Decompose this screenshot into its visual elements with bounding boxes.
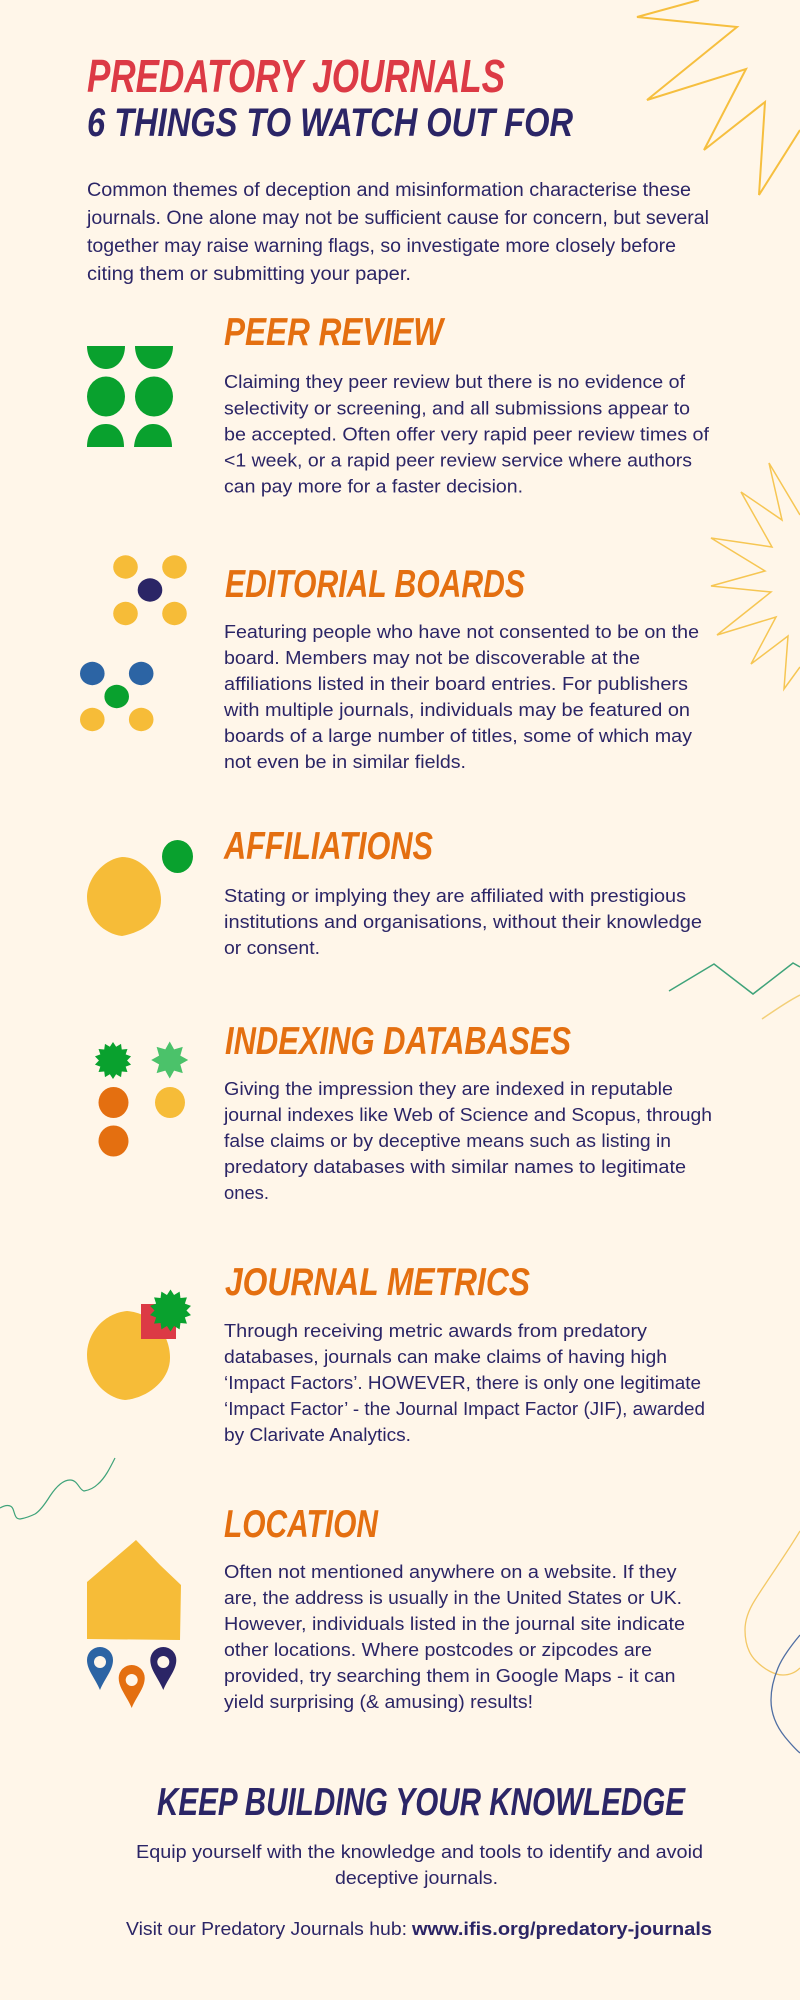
text: editorial boards [223, 621, 699, 772]
text: indexing databases: ones. [224, 1182, 269, 1203]
icon: blob, red square and green star [87, 1290, 191, 1400]
heading: peer review: PEER REVIEW [224, 311, 446, 354]
text: peer review [224, 371, 710, 496]
title [87, 50, 573, 145]
text: peer review: be accepted. Often offer very rapid peer review times of [224, 424, 710, 444]
heading: affiliations: AFFILIATIONS [223, 825, 433, 868]
icon: yellow blob and green dot [87, 840, 193, 936]
text: editorial boards: with multiple journals, individuals may be featured on [223, 699, 690, 720]
decoration: top yellow zigzag [637, 0, 800, 195]
text: indexing databases: Giving the impression they are indexed in reputable [224, 1078, 673, 1099]
text: hub link [126, 1918, 712, 1939]
text: peer review: can pay more for a faster decision. [224, 476, 523, 496]
text: location: provided, try searching them in Google Maps - it can [224, 1665, 676, 1686]
text: location [224, 1561, 685, 1712]
decoration: yellow line [762, 995, 800, 1019]
decoration: green squiggle [0, 1458, 115, 1519]
closing section [126, 1781, 712, 1939]
text: editorial boards: affiliations listed in their board entries. For publishers [224, 673, 688, 694]
text: location: However, individuals listed in the journal site indicate [224, 1613, 685, 1634]
icon: lower dot cluster [80, 662, 154, 731]
text: closing message: deceptive journals. [335, 1867, 498, 1888]
intro text: journals. One alone may not be sufficient cause for concern, but several [86, 208, 709, 229]
text: journal metrics: databases, journals can make claims of having high [224, 1346, 667, 1367]
text: indexing databases: false claims or by deceptive means such as listing in [224, 1130, 671, 1151]
title line 2: 6 THINGS TO WATCH OUT FOR [87, 101, 573, 145]
text: closing message [136, 1841, 703, 1888]
text: location: other locations. Where postcodes or zipcodes are [224, 1639, 652, 1660]
decoration: green zigzag [669, 963, 800, 994]
decoration: right yellow starburst [711, 463, 800, 689]
text: journal metrics: Through receiving metric awards from predatory [224, 1320, 648, 1341]
text: indexing databases: journal indexes like Web of Science and Scopus, through [223, 1104, 712, 1125]
intro text: Common themes of deception and misinformation characterise these [87, 180, 691, 201]
text: indexing databases: predatory databases with similar names to legitimate [224, 1156, 686, 1177]
text: peer review: <1 week, or a rapid peer review service where authors [224, 450, 692, 470]
text: editorial boards: not even be in similar fields. [224, 751, 466, 772]
heading: indexing databases: INDEXING DATABASES [225, 1020, 571, 1063]
text: location: yield surprising (& amusing) results! [224, 1691, 533, 1712]
text: hub link: www.ifis.org/predatory-journals [411, 1918, 712, 1939]
text: indexing databases [223, 1078, 712, 1203]
text: journal metrics: by Clarivate Analytics. [224, 1424, 411, 1445]
text: affiliations: institutions and organisations, without their knowledge [224, 911, 702, 932]
decoration: yellow curve [745, 1531, 800, 1675]
title line 1: PREDATORY JOURNALS [87, 50, 505, 102]
panel: peer review [87, 311, 710, 496]
intro text [86, 180, 709, 285]
text: journal metrics: ‘Impact Factors’. HOWEVER, there is only one legitimate [224, 1372, 701, 1393]
text: location: are, the address is usually in the United States or UK. [224, 1587, 682, 1608]
panel: location [87, 1503, 685, 1712]
panel: editorial boards [80, 555, 699, 772]
heading: journal metrics: JOURNAL METRICS [225, 1261, 530, 1304]
text: journal metrics: ‘Impact Factor’ - the Journal Impact Factor (JIF), awarded [224, 1398, 705, 1419]
intro text: together may raise warning flags, so investigate more closely before [87, 236, 676, 257]
panel: journal metrics [87, 1261, 705, 1445]
panel: affiliations [87, 825, 702, 958]
decoration: blue curve [771, 1635, 800, 1753]
text: editorial boards: Featuring people who have not consented to be on the [224, 621, 699, 642]
text: closing message: Equip yourself with the knowledge and tools to identify and avoid [136, 1841, 703, 1862]
text: editorial boards: boards of a large number of titles, some of which may [224, 725, 693, 746]
text: peer review: selectivity or screening, and all submissions appear to [224, 398, 690, 418]
text: hub link: Visit our Predatory Journals hub: [126, 1918, 407, 1939]
intro text: citing them or submitting your paper. [87, 264, 411, 285]
text: affiliations: Stating or implying they are affiliated with prestigious [224, 885, 686, 906]
icon: upper dot cluster [113, 555, 187, 625]
text: peer review: Claiming they peer review but there is no evidence of [224, 371, 686, 392]
text: affiliations: or consent. [224, 937, 320, 958]
icon: green half circles and ovals [87, 346, 173, 447]
text: location: Often not mentioned anywhere on a website. If they [224, 1561, 677, 1582]
panel: indexing databases [95, 1020, 712, 1203]
text: affiliations [224, 885, 702, 958]
icon: house and map pins [87, 1540, 181, 1708]
heading: editorial boards: EDITORIAL BOARDS [225, 563, 525, 606]
text: journal metrics [224, 1320, 705, 1445]
icon: stars and dots [95, 1042, 188, 1156]
text: editorial boards: board. Members may not be discoverable at the [224, 647, 640, 668]
heading: location: LOCATION [224, 1503, 379, 1546]
